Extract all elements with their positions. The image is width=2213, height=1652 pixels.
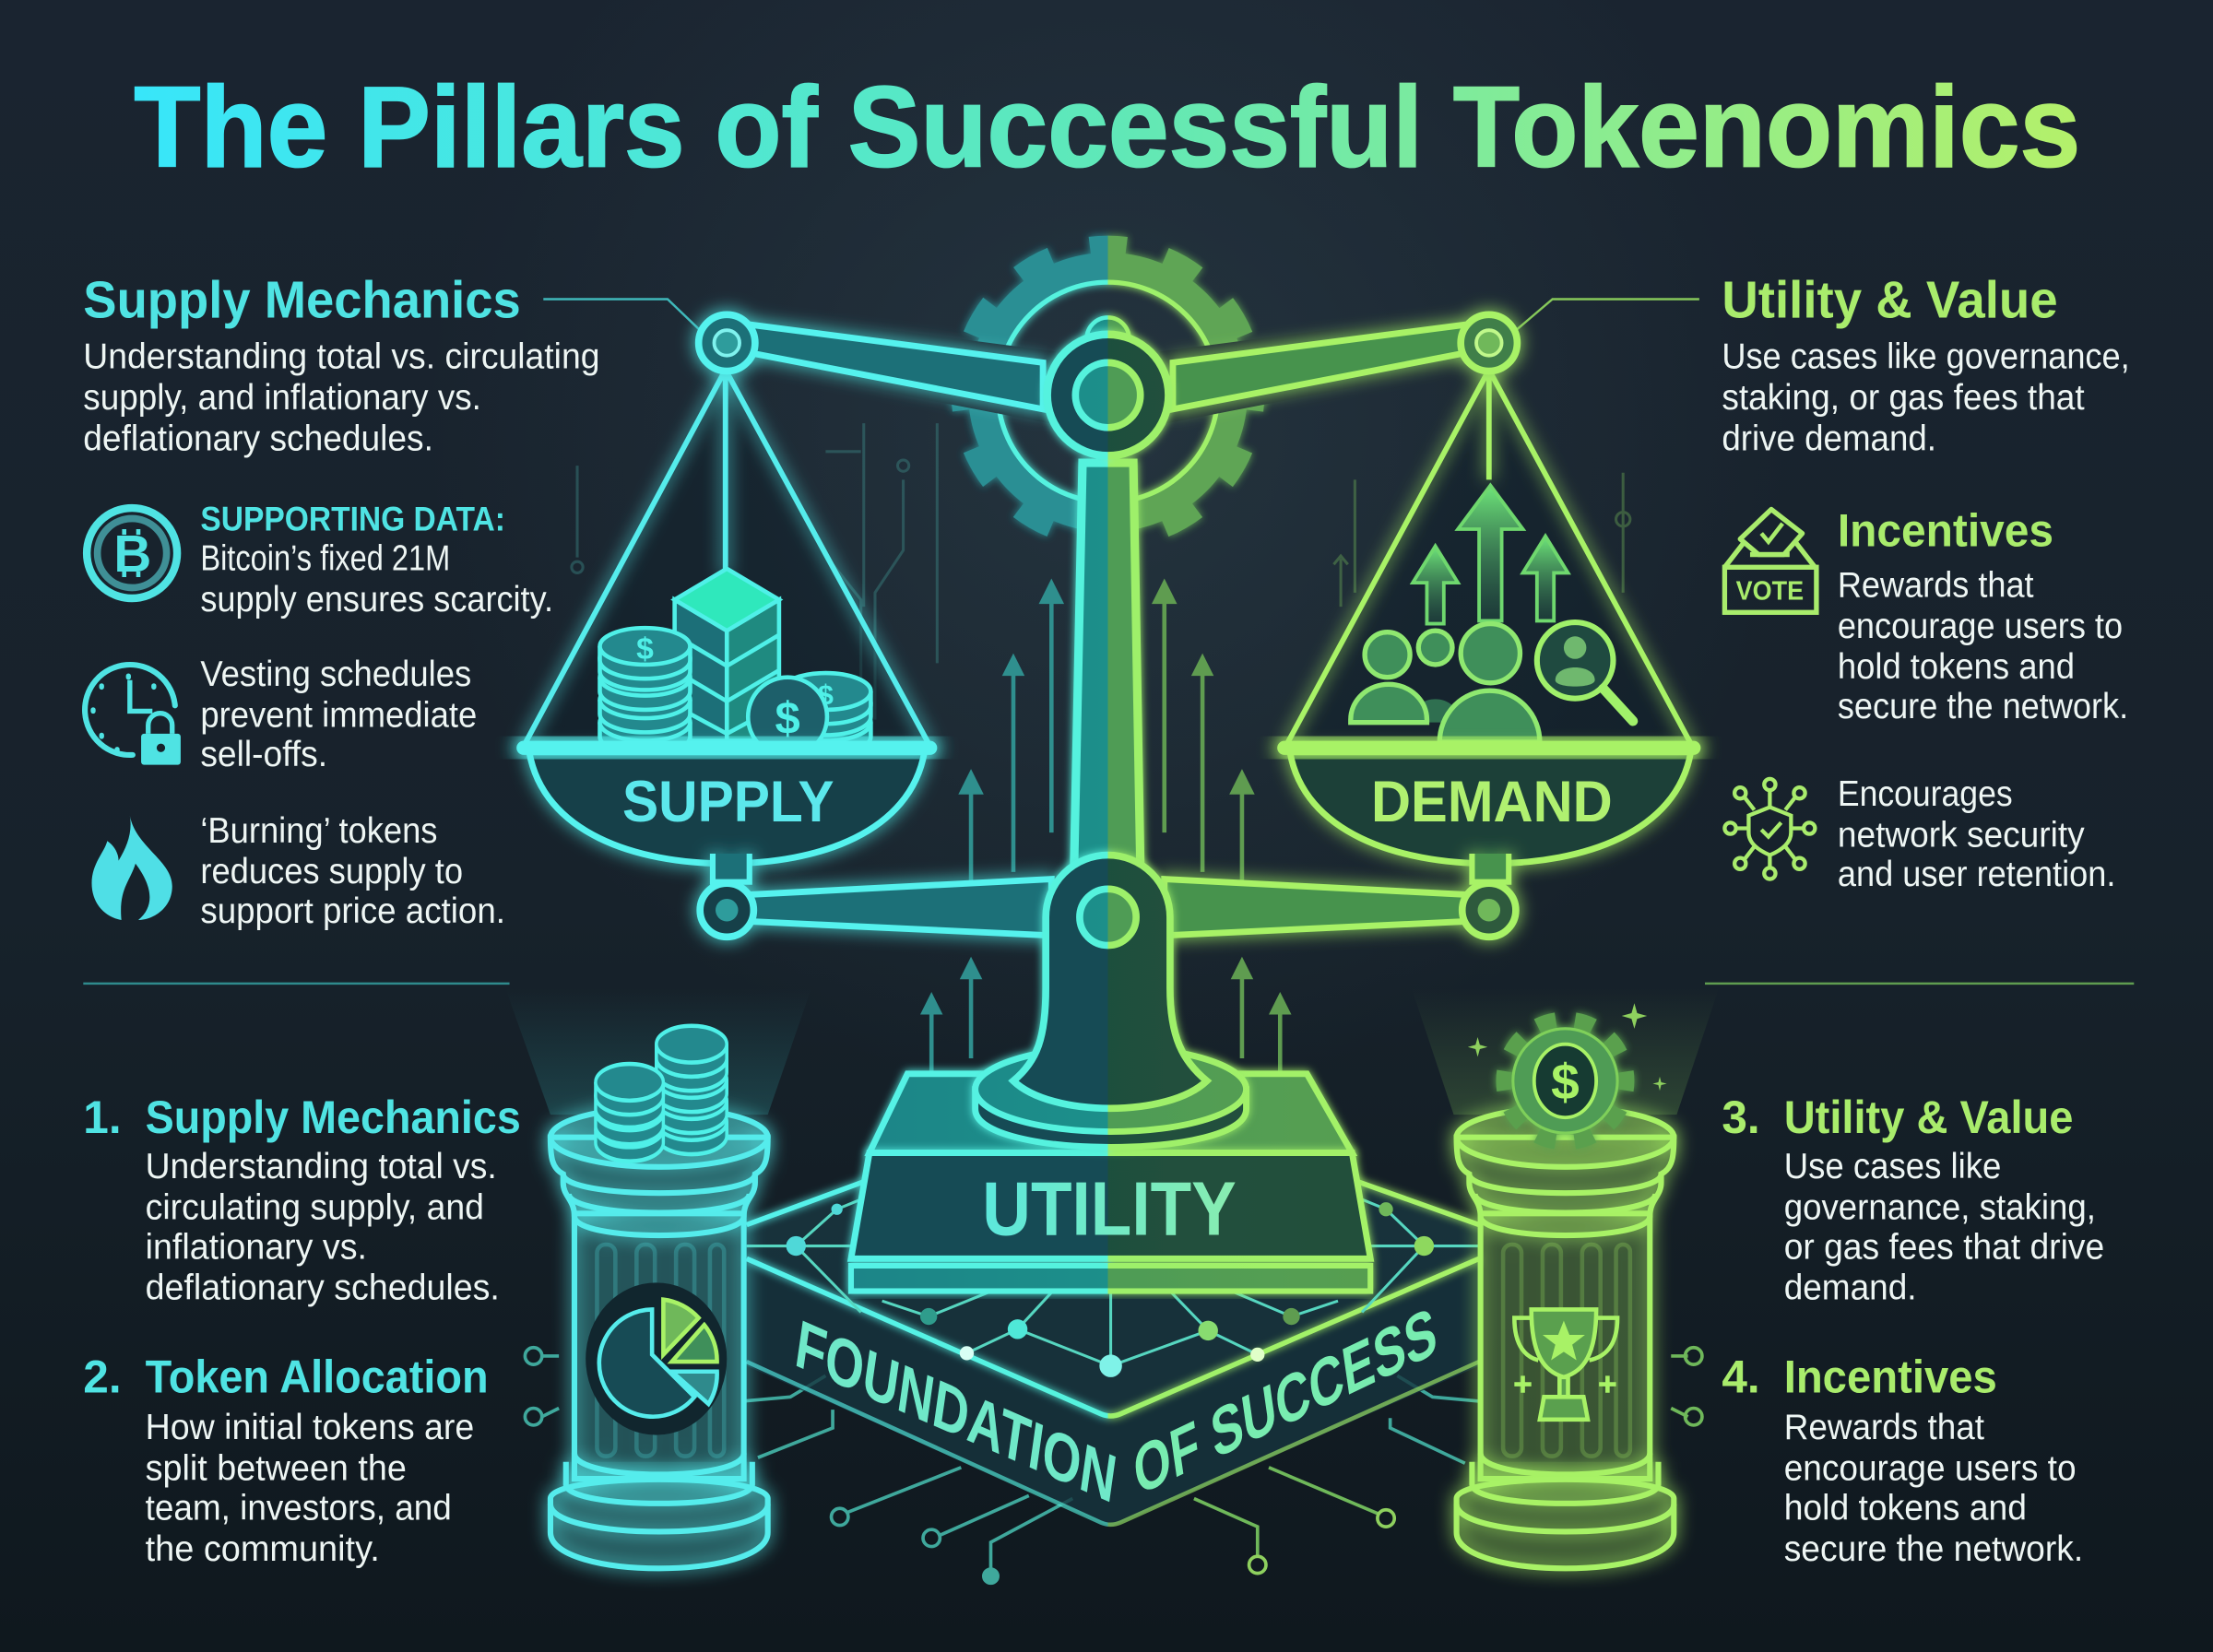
text: incentives description: encourage users to — [1838, 607, 2123, 646]
text: network security: and user retention. — [1838, 855, 2115, 894]
text: supporting data: supply ensures scarcity. — [200, 580, 553, 620]
text: network security: Encourages — [1838, 774, 2013, 814]
text: supporting data: SUPPORTING DATA: — [200, 501, 505, 538]
light beams above pillars — [505, 987, 1719, 1115]
text: utility description: Use cases like governance, — [1722, 336, 2130, 376]
icon: vote box — [1724, 510, 1817, 612]
item 4: encourage users to — [1784, 1449, 2077, 1489]
text: burning: ‘Burning’ tokens — [200, 811, 437, 851]
item 3 — [1722, 1091, 2104, 1308]
text: burning — [200, 811, 505, 931]
pedestal top — [870, 1074, 1352, 1153]
text: network security: network security — [1838, 815, 2085, 855]
item 1: Understanding total vs. — [146, 1147, 497, 1186]
item 1: Supply Mechanics — [146, 1091, 521, 1143]
label: UTILITY: UTILITY — [982, 1165, 1237, 1251]
item 3: Utility & Value — [1784, 1091, 2073, 1143]
text: vesting: prevent immediate — [200, 695, 477, 735]
item 2: the community. — [146, 1529, 380, 1569]
icon: bitcoin: B — [113, 525, 151, 584]
text: supporting data — [200, 501, 553, 620]
panel: utility and value (right column) — [1722, 271, 2130, 894]
text: incentives description: Rewards that — [1838, 565, 2034, 605]
pedestal labelled UTILITY — [851, 1074, 1370, 1292]
left pan interior shade — [525, 370, 929, 744]
text: utility description: drive demand. — [1722, 419, 1936, 458]
icon: gear with dollar on right pillar: $ — [1551, 1053, 1580, 1110]
text: incentives description — [1838, 565, 2128, 726]
item 3: demand. — [1784, 1268, 1917, 1308]
item 1 — [83, 1091, 521, 1308]
platform outlines — [747, 1180, 1479, 1525]
decorative rising arrows — [920, 579, 1292, 1072]
label: DEMAND: DEMAND — [1371, 770, 1613, 834]
growth arrows — [1413, 486, 1568, 624]
panel: numbered list left — [83, 1091, 521, 1569]
text: supply description: deflationary schedules. — [83, 419, 433, 458]
item 1: circulating supply, and — [146, 1187, 484, 1227]
left pillar — [550, 1108, 768, 1568]
item 4: Rewards that — [1784, 1408, 1984, 1447]
icon: flame — [91, 816, 172, 920]
icon: vote box: VOTE — [1736, 577, 1804, 607]
lower beam and pivots — [700, 854, 1516, 937]
label: SUPPLY: SUPPLY — [622, 770, 834, 834]
community figures — [1351, 624, 1540, 742]
item 2: How initial tokens are — [146, 1408, 474, 1447]
icon: clock with lock — [85, 665, 181, 765]
item 3: or gas fees that drive — [1784, 1227, 2104, 1267]
right coin stack — [780, 673, 870, 755]
text: incentives description: hold tokens and — [1838, 647, 2075, 687]
item 3: 3. — [1722, 1091, 1760, 1143]
magnifier icon — [1537, 622, 1633, 721]
item 2: 2. — [83, 1351, 122, 1403]
beam clearance against gear — [750, 324, 1466, 409]
supply token stack — [600, 569, 870, 756]
item 2: split between the — [146, 1449, 407, 1489]
item 3: governance, staking, — [1784, 1187, 2096, 1227]
left pan bowl — [529, 752, 925, 864]
title: The Pillars of Successful Tokenomics — [134, 65, 2080, 192]
text: supply description — [83, 336, 600, 458]
item 3: Use cases like — [1784, 1147, 2001, 1186]
upper beam — [699, 314, 1517, 409]
data cube — [675, 569, 779, 741]
left hangers — [525, 370, 929, 744]
right pan interior shade — [1287, 370, 1691, 744]
pedestal front — [851, 1153, 1370, 1258]
icon: shield network — [1724, 779, 1815, 879]
foundation platform — [525, 1180, 1702, 1583]
text: supporting data: Bitcoin’s fixed 21M — [200, 538, 450, 578]
large dollar coin: $ — [775, 694, 800, 744]
item 4 — [1722, 1351, 2083, 1569]
platform band — [747, 1258, 1479, 1527]
text: supply description: supply, and inflationary vs. — [83, 378, 481, 418]
icon: coin stacks on left pillar — [596, 1026, 727, 1162]
central hub — [1047, 335, 1168, 455]
text: incentives description: secure the network. — [1838, 687, 2128, 726]
item 2: team, investors, and — [146, 1488, 452, 1528]
panel: supply mechanics (left column) — [83, 271, 600, 931]
central column — [1074, 463, 1141, 867]
item 1: 1. — [83, 1091, 122, 1143]
heading: Supply Mechanics: Supply Mechanics — [83, 271, 521, 329]
left pan rim — [516, 741, 937, 755]
large dollar coin — [748, 678, 827, 756]
right pan rim — [1277, 741, 1700, 755]
right hangers — [1287, 370, 1691, 744]
right pan bowl — [1290, 752, 1691, 864]
right pillar — [1457, 1108, 1674, 1568]
text: network security — [1838, 774, 2115, 894]
icon: trophy on right pillar — [1514, 1309, 1617, 1420]
item 2: Token Allocation — [146, 1351, 489, 1403]
left coin stack: $ — [636, 632, 654, 667]
circuit traces under platform — [525, 1348, 1702, 1583]
text: supply description: Understanding total vs. circulating — [83, 336, 600, 376]
faint background circuit traces — [572, 423, 1630, 720]
item 1: inflationary vs. — [146, 1227, 367, 1267]
text: vesting: sell-offs. — [200, 735, 327, 774]
pedestal slab — [851, 1266, 1370, 1292]
text: utility description: staking, or gas fees that — [1722, 378, 2085, 418]
item 1: deflationary schedules. — [146, 1268, 500, 1308]
icon: bitcoin — [87, 508, 177, 598]
heading: Incentives: Incentives — [1838, 503, 2053, 556]
gear behind scale — [961, 245, 1255, 539]
icon: pie chart on left pillar — [586, 1282, 727, 1435]
item 4: Incentives — [1784, 1351, 1997, 1403]
icon: gear with dollar on right pillar — [1506, 1021, 1625, 1140]
scale left arm pan — [516, 370, 937, 864]
left coin stack — [600, 628, 690, 755]
text: FOUNDATION: FOUNDATION — [791, 1306, 1121, 1518]
text: OF SUCCESS: OF SUCCESS — [1130, 1292, 1441, 1510]
platform top face — [747, 1180, 1479, 1418]
heading: Utility & Value: Utility & Value — [1722, 271, 2058, 329]
text: burning: reduces supply to — [200, 852, 463, 891]
text: vesting: Vesting schedules — [200, 655, 471, 694]
text: utility description — [1722, 336, 2130, 458]
item 2 — [83, 1351, 489, 1569]
panel: numbered list right — [1722, 1091, 2104, 1569]
stand neck and knob — [976, 856, 1247, 1147]
right coin stack: $ — [818, 679, 834, 711]
text: vesting — [200, 655, 477, 774]
item 4: secure the network. — [1784, 1529, 2083, 1569]
item 4: hold tokens and — [1784, 1488, 2027, 1528]
platform node network — [747, 1199, 1479, 1377]
icon: sparkles near gear — [1468, 1003, 1667, 1091]
scale right arm pan — [1277, 370, 1700, 864]
text: burning: support price action. — [200, 891, 505, 931]
item 4: 4. — [1722, 1351, 1760, 1403]
